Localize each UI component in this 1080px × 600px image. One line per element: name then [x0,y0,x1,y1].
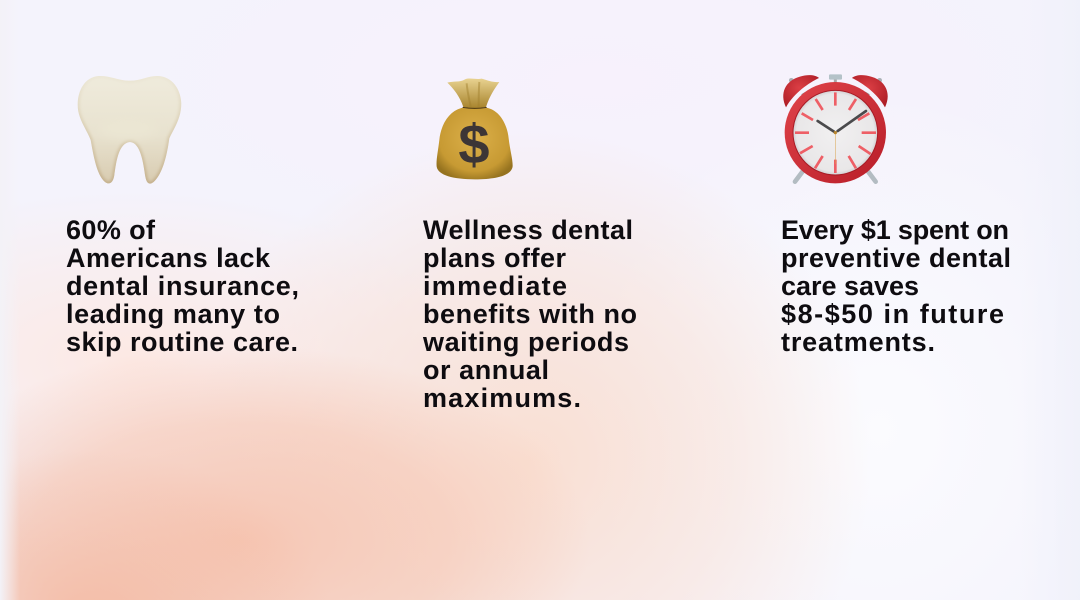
text block: dental insurance statistic: 60% of [66,215,156,245]
text block: wellness dental plans: plans offer [423,243,566,273]
text block: preventive care savings: treatments. [781,327,935,357]
text block: wellness dental plans: benefits with no [423,299,637,329]
clock legs [795,168,876,182]
text block: wellness dental plans [422,215,637,413]
text block: dental insurance statistic: leading many to [66,299,280,329]
icon: tooth [78,76,181,184]
hour ticks [795,92,876,173]
bag neck [447,79,499,108]
clock hands [818,111,866,132]
dollar sign: $ [458,112,490,175]
text block: preventive care savings: Every $1 spent on [781,215,1009,245]
text block: preventive care savings: care saves [781,271,919,301]
text block: wellness dental plans: Wellness dental [423,215,633,245]
icon: money bag [437,79,513,179]
text block: wellness dental plans: maximums. [423,383,581,413]
text block: preventive care savings [781,215,1011,357]
icon: alarm clock [783,74,888,183]
text block: dental insurance statistic: dental insurance, [66,271,299,301]
top button [831,77,840,88]
bell knobs [789,78,794,83]
bell connectors [802,93,869,96]
text block: wellness dental plans: or annual [423,355,549,385]
text block: dental insurance statistic: skip routine care. [66,327,298,357]
second hand [834,133,836,164]
clock body [785,82,886,183]
bag body [437,108,513,179]
bells [783,75,819,107]
text block: preventive care savings: preventive dental [781,243,1011,273]
text block: dental insurance statistic [66,215,299,357]
text block: wellness dental plans: waiting periods [422,327,629,357]
text block: preventive care savings: $8-$50 in future [781,299,1004,329]
text block: wellness dental plans: immediate [423,271,567,301]
text block: dental insurance statistic: Americans lack [66,243,271,273]
